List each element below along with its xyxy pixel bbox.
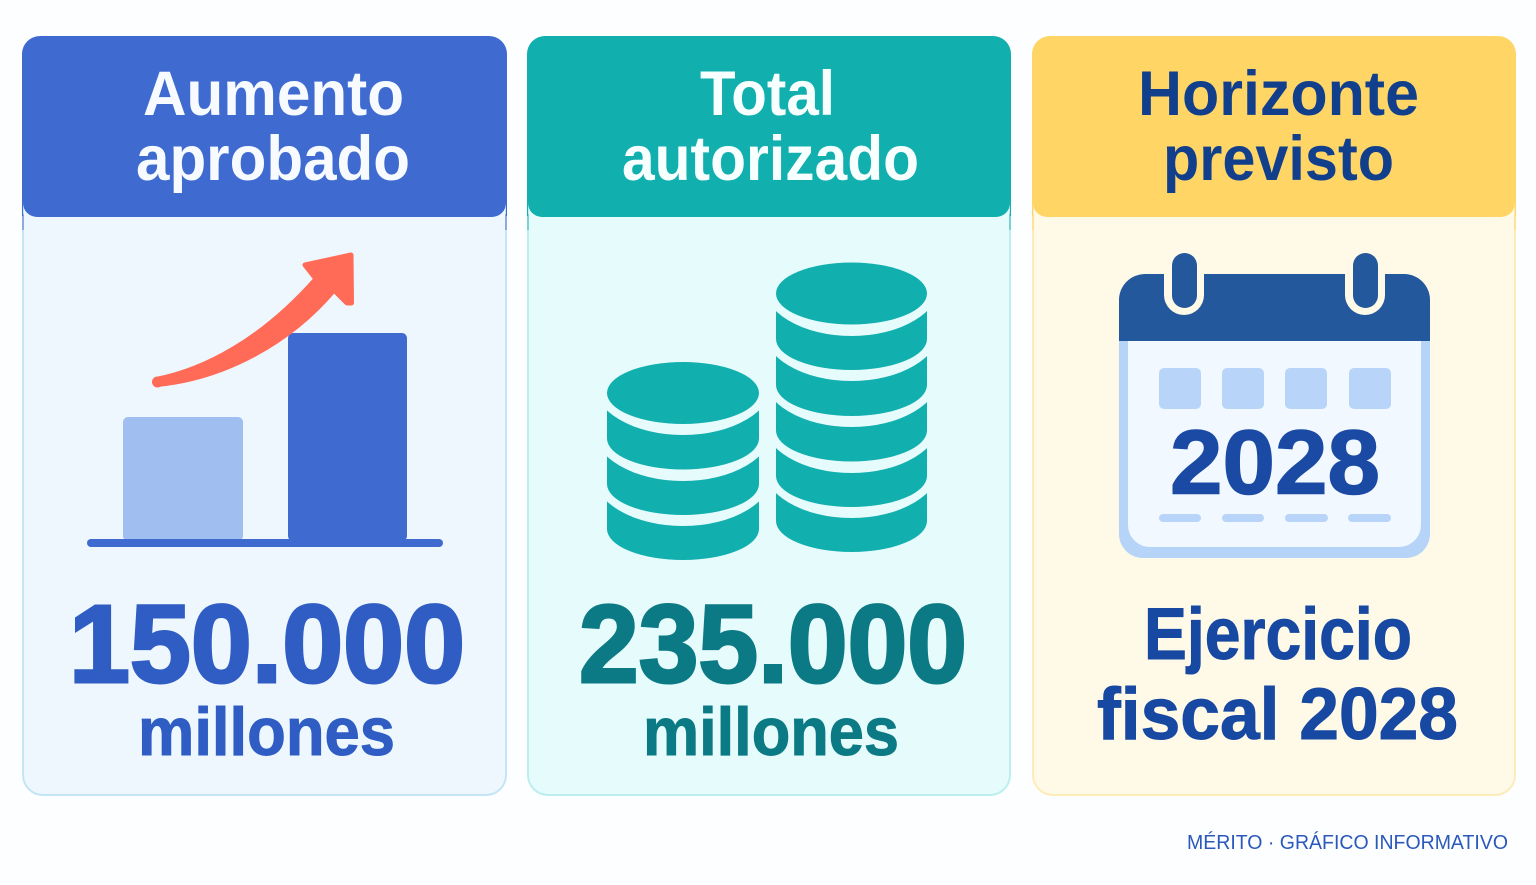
panel body: aumento	[23, 37, 506, 795]
header: total autorizado	[527, 36, 1011, 217]
left stack	[593, 329, 773, 560]
header: horizonte previsto	[1032, 36, 1516, 217]
right stack	[762, 230, 940, 552]
value: 150.000 millones: millones	[138, 694, 395, 770]
header: horizonte previsto: Horizonte	[1138, 59, 1419, 129]
footer credit: MÉRITO · GRÁFICO INFORMATIVO	[1187, 831, 1508, 854]
value: 235.000 millones: 235.000	[579, 583, 967, 706]
header: aumento aprobado: aprobado	[136, 124, 410, 194]
value: 150.000 millones	[69, 583, 465, 770]
value: ejercicio fiscal 2028	[1097, 594, 1458, 755]
value: 150.000 millones: 150.000	[69, 583, 465, 706]
value: ejercicio fiscal 2028: fiscal 2028	[1097, 674, 1458, 755]
value: ejercicio fiscal 2028: Ejercicio	[1144, 594, 1412, 675]
icon: calendar 2028: 2028	[1170, 412, 1380, 514]
header: aumento aprobado: Aumento	[143, 59, 404, 129]
header: horizonte previsto: previsto	[1163, 124, 1394, 194]
icon: bar chart with rising arrow	[87, 255, 443, 547]
panel: horizonte previsto	[1032, 36, 1516, 795]
panel body: total	[528, 37, 1010, 795]
panel body: horizonte	[1033, 37, 1515, 795]
value: 235.000 millones	[579, 583, 967, 770]
header: aumento aprobado	[22, 36, 507, 217]
panel: total autorizado	[527, 36, 1011, 795]
panel: aumento aprobado	[22, 36, 507, 795]
header: total autorizado: autorizado	[622, 124, 919, 194]
icon: calendar 2028	[1119, 253, 1430, 558]
header: total autorizado: Total	[700, 59, 835, 129]
value: 235.000 millones: millones	[643, 694, 899, 770]
icon: coin stacks	[593, 230, 940, 560]
